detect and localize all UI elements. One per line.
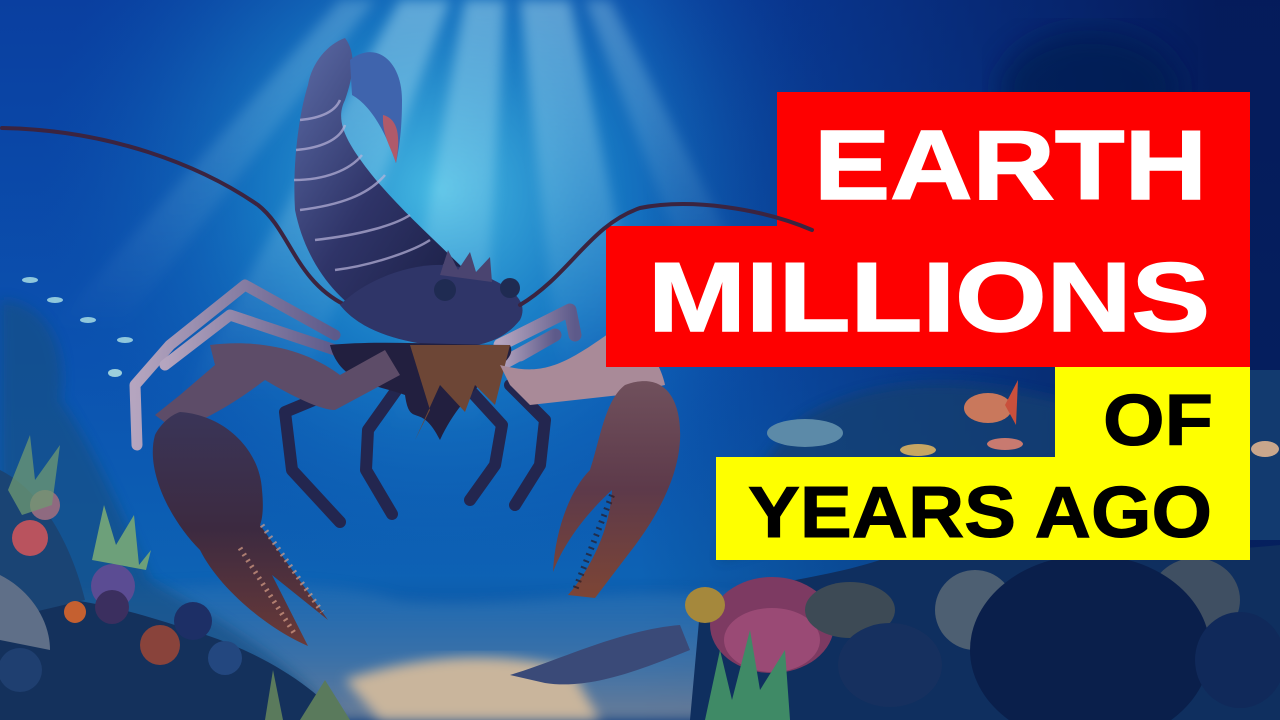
walking legs, pale: [135, 285, 575, 445]
yellow title panel: [716, 367, 1250, 560]
tail stinger: [350, 52, 402, 163]
sea floor: [0, 580, 1280, 720]
carapace head: [340, 265, 523, 347]
left arm: [155, 343, 400, 430]
tail segments: [294, 38, 470, 318]
right reef: [510, 370, 1280, 720]
underside and mouth bristles: [330, 343, 511, 440]
right arm: [500, 325, 665, 405]
right claw teeth: [575, 495, 612, 590]
light rays: [50, 0, 760, 430]
heading: MILLIONS: MILLIONS: [648, 242, 1210, 352]
sea scorpion creature: [2, 38, 680, 646]
red title panel: [606, 92, 1250, 367]
heading: YEARS AGO: YEARS AGO: [748, 473, 1212, 553]
left claw teeth: [240, 525, 322, 636]
dark legs: [285, 385, 545, 522]
small fish: [22, 277, 1279, 457]
heading: EARTH: EARTH: [814, 110, 1207, 220]
left claw: [153, 412, 328, 646]
tail plates: [294, 100, 450, 295]
left antenna: [2, 128, 430, 318]
right claw: [553, 381, 680, 598]
left reef: [0, 300, 350, 720]
title banner: [606, 92, 1250, 560]
right antenna: [520, 204, 812, 305]
heading: OF: OF: [1103, 381, 1213, 461]
